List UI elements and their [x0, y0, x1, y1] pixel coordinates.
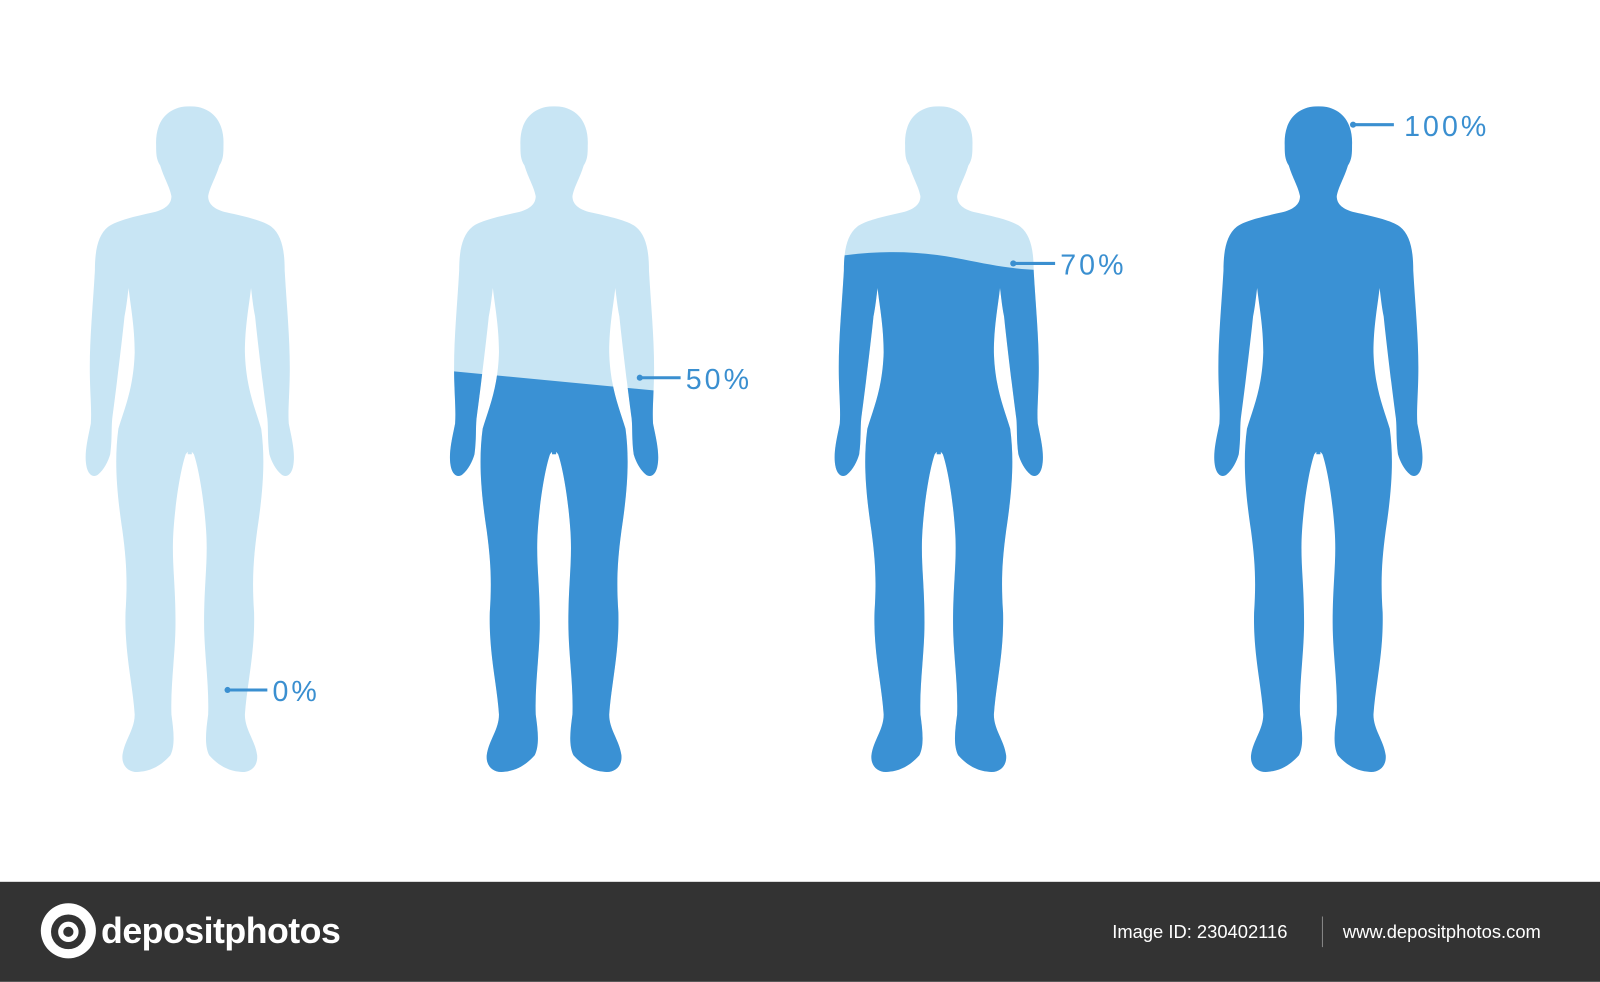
label: 100%: [1350, 111, 1489, 143]
figure: 0% hydration: [82, 92, 320, 786]
figure: 70% hydration: [831, 92, 1127, 786]
figure: 50% hydration: [446, 92, 752, 786]
brand name: depositphotos: [101, 911, 340, 951]
label: 70%: [1010, 250, 1127, 282]
label: 50%: [637, 364, 752, 396]
label: 0%: 0%: [272, 676, 320, 708]
label: 0%: [224, 676, 320, 708]
footer bar: [0, 882, 1600, 982]
label: 100%: 100%: [1404, 111, 1489, 143]
icon: camera logo: [41, 903, 96, 958]
figure: 100% hydration: [1210, 92, 1489, 786]
image id: Image ID: 230402116: [1112, 921, 1287, 942]
label: 70%: 70%: [1060, 250, 1127, 282]
website: www.depositphotos.com: [1342, 921, 1541, 942]
label: 50%: 50%: [686, 364, 752, 396]
